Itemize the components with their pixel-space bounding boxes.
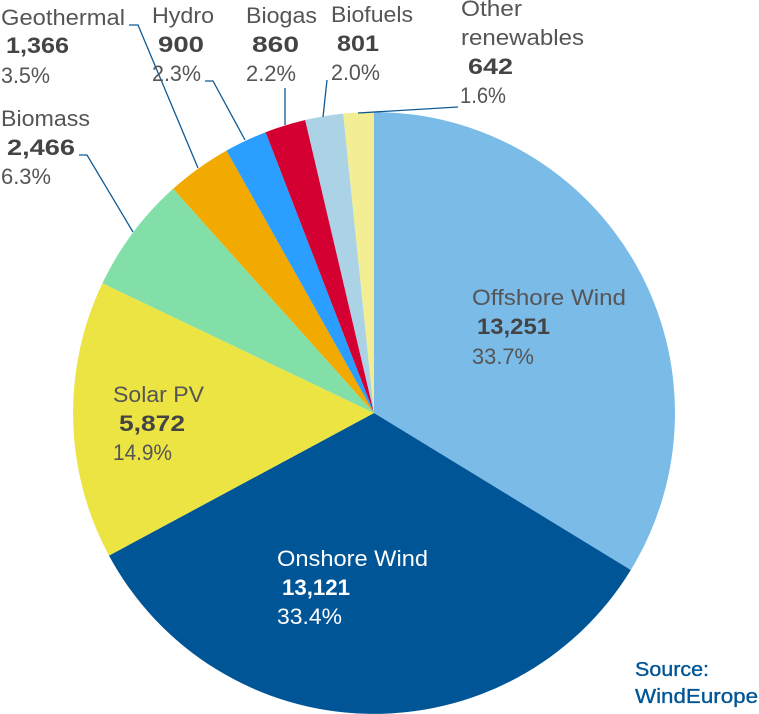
slice: hydro bbox=[226, 132, 374, 413]
label: onshore wind bbox=[277, 546, 428, 629]
label: geothermal: 1,366 bbox=[6, 33, 69, 58]
label: biomass: Biomass bbox=[1, 106, 90, 131]
label: biomass: 6.3% bbox=[1, 164, 51, 189]
label: offshore wind: 33.7% bbox=[472, 344, 534, 369]
leader line: biomass bbox=[79, 155, 133, 232]
label: solar PV: Solar PV bbox=[113, 382, 204, 407]
leader line: biofuels bbox=[323, 80, 327, 117]
slice: biomass bbox=[102, 189, 374, 413]
label: offshore wind: Offshore Wind bbox=[472, 285, 626, 310]
slice: other renewables bbox=[343, 112, 374, 413]
label: offshore wind bbox=[472, 285, 626, 369]
label: solar PV: 5,872 bbox=[119, 411, 185, 436]
label: other renewables bbox=[460, 0, 584, 108]
label: biomass bbox=[1, 106, 90, 189]
label: biogas bbox=[246, 3, 317, 86]
label: biogas: Biogas bbox=[246, 3, 317, 28]
label: hydro: 2.3% bbox=[152, 61, 201, 86]
label: geothermal: 3.5% bbox=[1, 63, 50, 88]
label: biofuels: 2.0% bbox=[331, 60, 380, 85]
slice: onshore wind bbox=[109, 413, 631, 714]
label: hydro bbox=[152, 3, 214, 86]
slice: biogas bbox=[266, 120, 374, 413]
pie chart bbox=[73, 112, 675, 714]
label: hydro: Hydro bbox=[152, 3, 214, 28]
slice: offshore wind bbox=[374, 112, 675, 570]
slice: solar PV bbox=[73, 283, 374, 556]
label: biofuels: 801 bbox=[337, 31, 379, 56]
leader line: other renewables bbox=[358, 107, 458, 113]
label: offshore wind: 13,251 bbox=[477, 314, 550, 339]
label: biofuels bbox=[331, 2, 413, 85]
label: other renewables: 642 bbox=[468, 54, 513, 79]
leader line: hydro bbox=[205, 81, 245, 140]
label: onshore wind: 13,121 bbox=[282, 575, 350, 600]
label: other renewables: 1.6% bbox=[460, 83, 506, 108]
source note: Source: bbox=[635, 659, 709, 681]
label: geothermal: Geothermal bbox=[1, 5, 125, 30]
label: biogas: 2.2% bbox=[246, 61, 296, 86]
leader line: geothermal bbox=[129, 25, 198, 168]
label: solar PV bbox=[113, 382, 204, 465]
source note bbox=[635, 659, 758, 708]
label: onshore wind: Onshore Wind bbox=[277, 546, 428, 571]
label: onshore wind: 33.4% bbox=[277, 604, 342, 629]
slice: biofuels bbox=[305, 114, 374, 413]
label: other renewables: renewables bbox=[461, 25, 584, 50]
label: biogas: 860 bbox=[252, 32, 299, 57]
label: biofuels: Biofuels bbox=[331, 2, 413, 27]
leader line: biogas bbox=[284, 88, 286, 125]
label: solar PV: 14.9% bbox=[113, 440, 172, 465]
label: geothermal bbox=[1, 5, 125, 88]
source note: WindEurope bbox=[635, 686, 758, 708]
slice: geothermal bbox=[173, 151, 374, 413]
label: biomass: 2,466 bbox=[7, 135, 75, 160]
label: hydro: 900 bbox=[158, 32, 204, 57]
